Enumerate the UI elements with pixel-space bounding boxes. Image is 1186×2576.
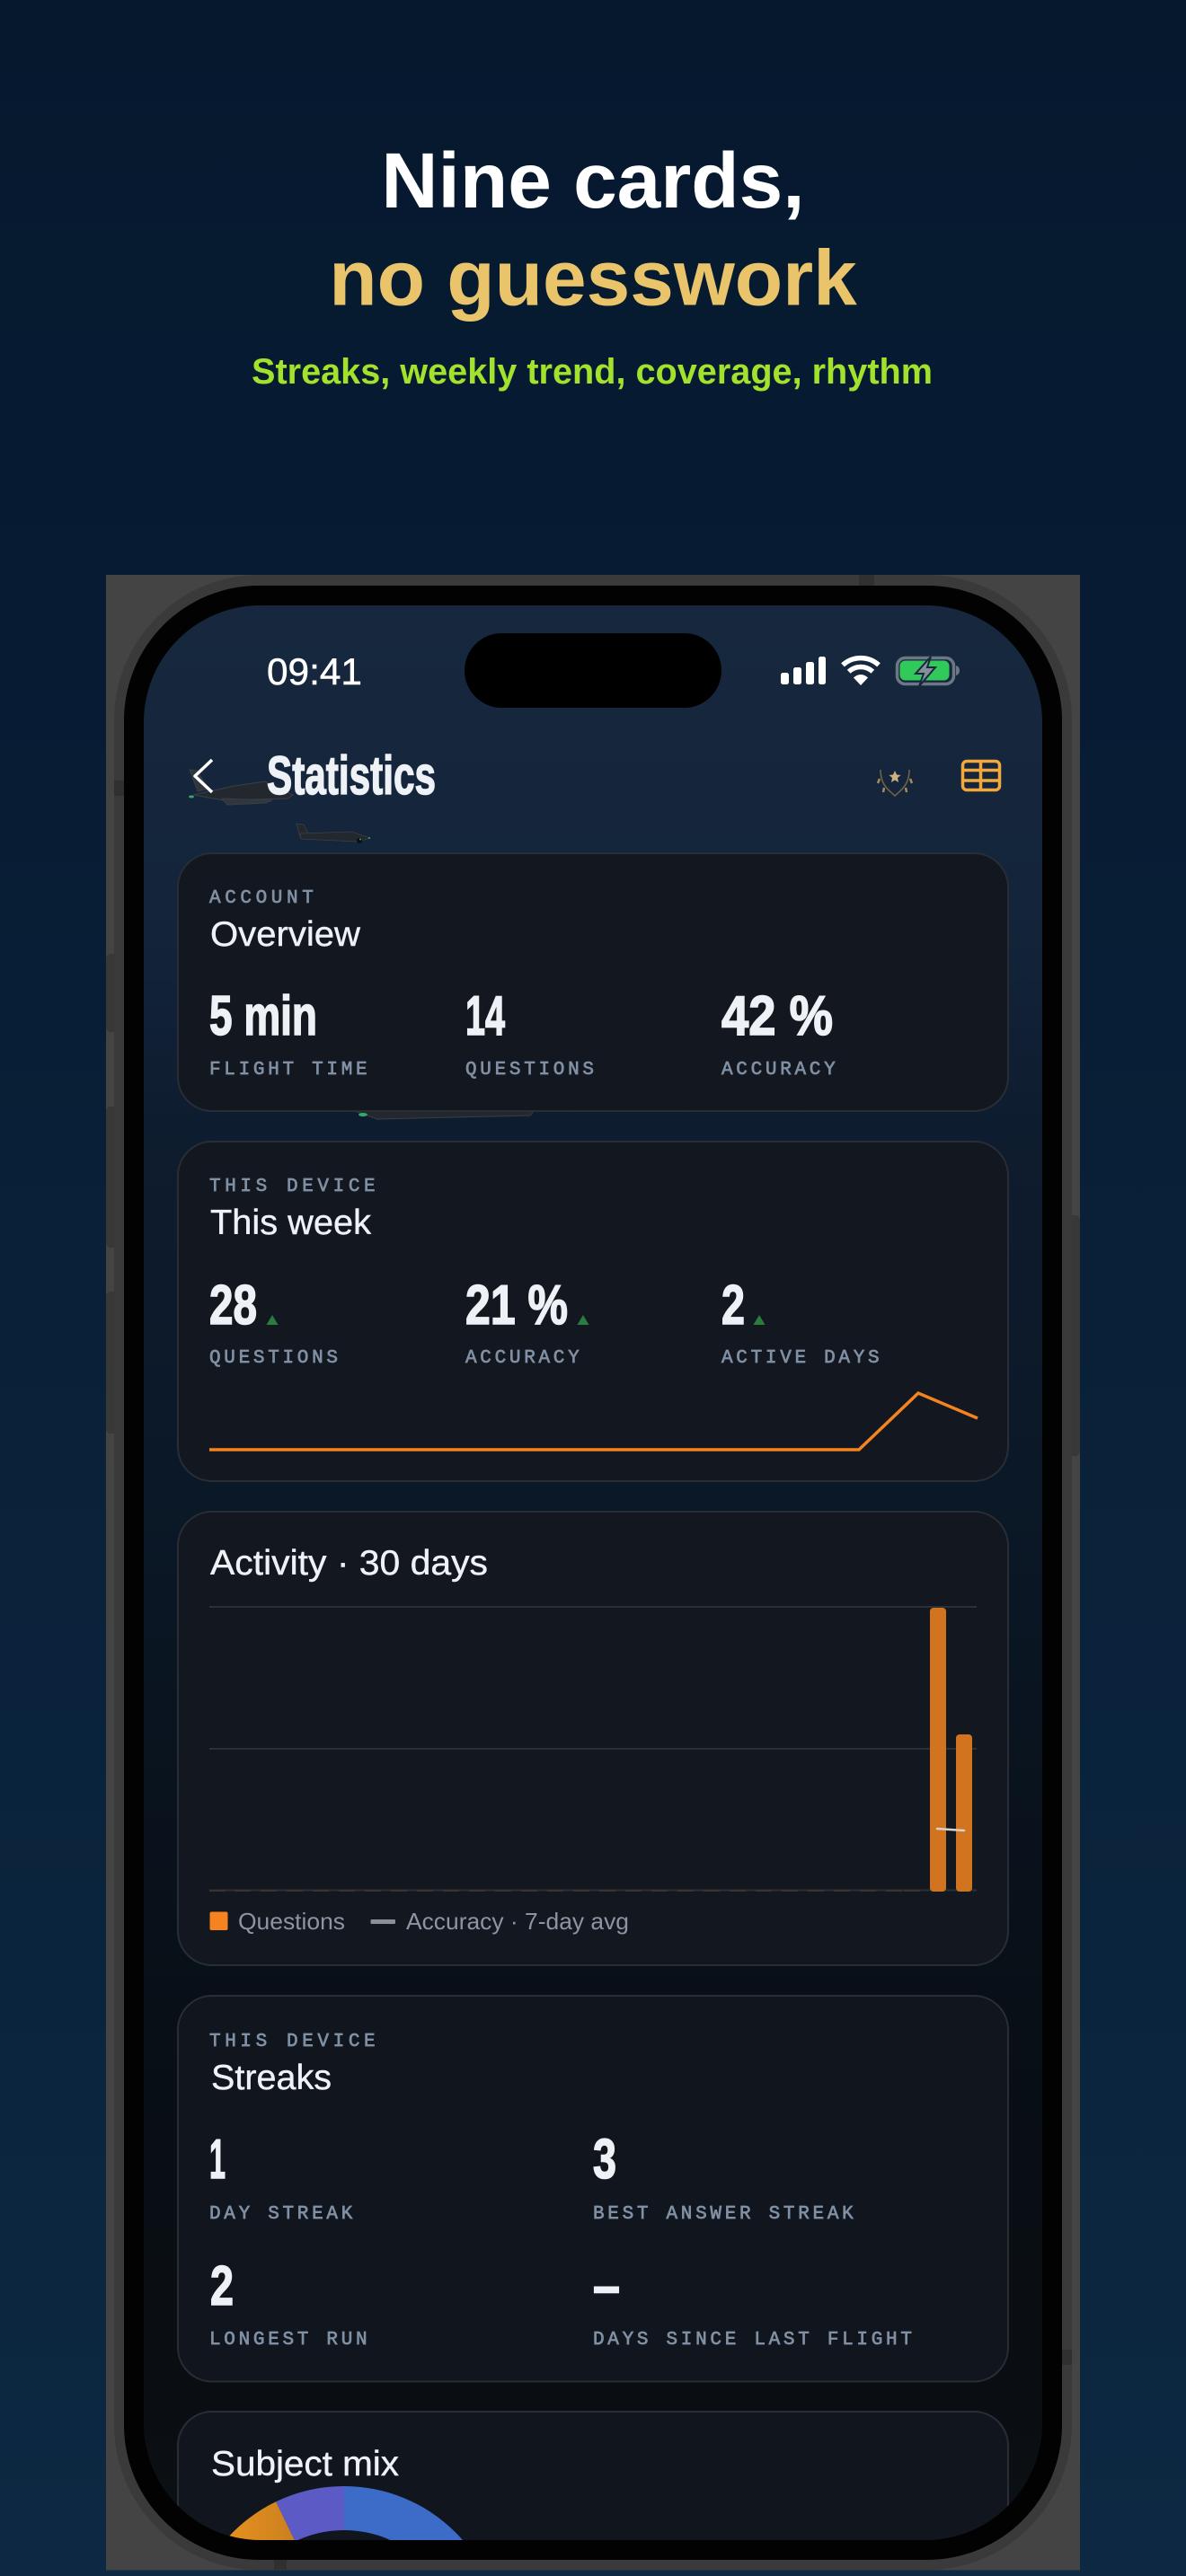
screen heading: Statistics [267, 745, 436, 806]
icon: battery charging [897, 657, 960, 686]
panel: this week [178, 1142, 1008, 1481]
stat: flight time [210, 993, 367, 1074]
title: no guesswork [329, 234, 857, 322]
subtitle: Streaks, weekly trend, coverage, rhythm [252, 352, 933, 392]
stat: best answer streak: 3 [593, 2129, 616, 2191]
stat: longest run: LONGEST RUN [209, 2330, 370, 2351]
stat: best answer streak: BEST ANSWER STREAK [593, 2204, 856, 2225]
legend: Questions [238, 1908, 345, 1935]
decorative plane behind card [355, 1111, 534, 1119]
left side buttons [106, 954, 119, 1434]
stat: flight time: FLIGHT TIME [209, 1060, 370, 1081]
stat: active days [721, 1284, 879, 1363]
donut chart [229, 2486, 463, 2540]
panel: overview [178, 853, 1008, 1111]
icon: laurel emblem [878, 770, 912, 796]
phone frame [114, 575, 1072, 2571]
heading: Activity · 30 days [210, 1544, 488, 1583]
heading: Streaks [211, 2059, 332, 2097]
stat: longest run: 2 [210, 2255, 234, 2317]
panel: subject mix [177, 2411, 1009, 2540]
antenna bands [114, 575, 1072, 2571]
icon: wifi [843, 658, 879, 685]
legend [210, 1911, 627, 1935]
phone mockup [106, 575, 1080, 2576]
icon: signal bars [781, 657, 826, 684]
stat: accuracy: 21 % [465, 1275, 568, 1337]
stat: day streak: 1 [209, 2129, 226, 2191]
legend: Accuracy · 7-day avg [406, 1908, 629, 1935]
right side button [1067, 1215, 1080, 1456]
stat: active days: 2 [721, 1275, 745, 1337]
icon: table grid [963, 762, 999, 790]
stat: questions: 28 [209, 1275, 257, 1337]
back chevron [195, 760, 212, 792]
stat: days since last flight: DAYS SINCE LAST FLIGHT [593, 2330, 916, 2351]
stat: days since last flight: – [593, 2255, 620, 2317]
title [329, 137, 857, 322]
panel: streaks [178, 1996, 1008, 2382]
stat: day streak: DAY STREAK [209, 2204, 356, 2225]
stat: accuracy [721, 995, 836, 1074]
stat: longest run [211, 2265, 367, 2344]
stat: accuracy: ACCURACY [465, 1348, 582, 1369]
sparkline [209, 1393, 978, 1450]
stat: active days: ACTIVE DAYS [721, 1348, 882, 1369]
decorative plane left [189, 770, 293, 805]
screen [144, 605, 1042, 2576]
eyebrow: THIS DEVICE [209, 2032, 379, 2052]
dynamic island [465, 633, 721, 708]
stat: accuracy: 42 % [721, 985, 833, 1047]
title: Nine cards, [381, 137, 805, 225]
stat: accuracy [465, 1284, 589, 1363]
stat: questions [465, 995, 593, 1079]
eyebrow: THIS DEVICE [209, 1177, 379, 1197]
heading: This week [210, 1204, 372, 1242]
stat: questions: QUESTIONS [465, 1060, 597, 1081]
stat: questions [210, 1284, 338, 1367]
bezel [124, 586, 1062, 2560]
stat: questions: 14 [465, 985, 505, 1047]
stat: best answer streak [593, 2138, 854, 2219]
stat: flight time: 5 min [209, 985, 317, 1047]
stat: accuracy: ACCURACY [721, 1060, 838, 1081]
stat: days since last flight [593, 2287, 912, 2344]
bar chart [209, 1607, 977, 1892]
status time: 09:41 [267, 650, 362, 693]
stat: day streak [210, 2139, 353, 2219]
panel: activity 30 days [178, 1512, 1008, 1965]
stat: questions: QUESTIONS [209, 1348, 341, 1369]
heading: Subject mix [211, 2445, 400, 2483]
heading: Overview [210, 915, 361, 954]
eyebrow: ACCOUNT [209, 888, 317, 909]
decorative plane center [296, 824, 370, 843]
